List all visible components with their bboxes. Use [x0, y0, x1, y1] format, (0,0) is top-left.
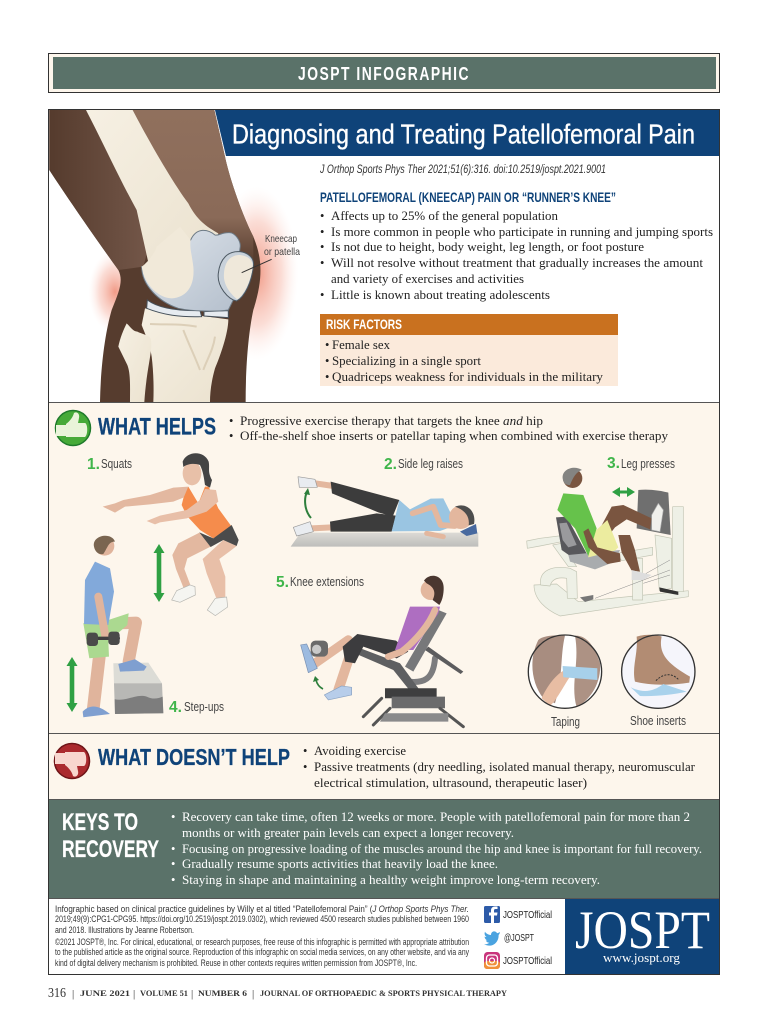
- exercise label 5: knee extensions: [276, 574, 364, 591]
- bullet list: about the condition: •: [320, 240, 324, 254]
- panel: keys to recovery: [49, 800, 719, 898]
- bullet list: about the condition: •: [320, 288, 324, 302]
- panel: risk factors: Female sex: [332, 338, 391, 352]
- heading: patellofemoral pain: PATELLOFEMORAL (KNEECAP) PAIN OR “RUNNER’S KNEE”: [320, 189, 616, 205]
- footer text: source and copyright: Infographic based on clinical practice guidelines by Willy et al titled “Patellofemoral Pain” (J Orthop Sports Phys Ther.: [55, 904, 469, 914]
- footer text: source and copyright: and 2018. Illustrations by Jeanne Robertson.: [55, 925, 194, 935]
- icon: taping circle: [528, 635, 602, 708]
- icon: twitter: [484, 931, 500, 946]
- leg silhouette: [49, 110, 260, 402]
- footer text: source and copyright: kind of digital delivery mechanism is prohibited. Reuse in other contexts requires written permission from JOSPT®, Inc.: [55, 958, 417, 968]
- bullet list: about the condition: Little is known about treating adolescents: [331, 288, 550, 302]
- label: twitter handle: @JOSPT: [504, 932, 534, 944]
- heading: keys to recovery: KEYS TO: [62, 809, 138, 836]
- bullet list: about the condition: Affects up to 25% of the general population: [331, 209, 559, 223]
- page footer: JOURNAL OF ORTHOPAEDIC & SPORTS PHYSICAL THERAPY: [260, 989, 507, 998]
- bullet list: keys to recovery: months or with greater pain levels can expect a longer recovery.: [182, 826, 514, 840]
- footer text: source and copyright: to the published article as the original source. Reproduction of this infographic on social media services, on any other website, and via any: [55, 947, 469, 957]
- page footer: |: [133, 988, 135, 1000]
- illustration: side leg raise: [291, 477, 478, 547]
- illustration: squat: [103, 453, 239, 616]
- arrow: side leg raise: [304, 488, 311, 518]
- panel: risk factors: •: [325, 354, 329, 368]
- bullet list: keys to recovery: •: [171, 873, 175, 887]
- exercise label 4: step-ups: 4.: [169, 699, 182, 716]
- exercise label 4: step-ups: [169, 699, 224, 716]
- bullet list: keys to recovery: •: [171, 810, 175, 824]
- label: kneecap or patella: Kneecap: [265, 233, 297, 245]
- label: taping: Taping: [551, 715, 580, 729]
- exercise label 1: squats: 1.: [87, 456, 100, 473]
- exercise label 1: squats: [87, 456, 132, 473]
- bullet list: what helps: [229, 414, 669, 443]
- page footer: [48, 986, 507, 1001]
- citation: J Orthop Sports Phys Ther 2021;51(6):316. doi:10.2519/jospt.2021.9001: [319, 162, 606, 176]
- header banner: JOSPT Infographic: [48, 54, 720, 92]
- exercise label 2: side leg raises: Side leg raises: [398, 457, 463, 471]
- page footer: JUNE 2021: [80, 989, 130, 998]
- panel background: what doesn't help: [49, 734, 719, 799]
- illustration: leg press: [527, 468, 688, 616]
- arrow: squat movement: [154, 544, 164, 602]
- exercise label 2: side leg raises: [384, 456, 463, 473]
- page footer: |: [191, 988, 193, 1000]
- bullet list: keys to recovery: •: [171, 857, 175, 871]
- icon: thumbs down: [54, 744, 90, 778]
- panel background: what helps: [49, 403, 719, 733]
- arrow: step-up movement: [66, 657, 78, 712]
- bullet list: keys to recovery: Focusing on progressive loading of the muscles around the hip and knee is important for full recovery.: [182, 842, 702, 856]
- bullet list: what doesn't help: •: [303, 744, 307, 758]
- label: facebook handle: JOSPTOfficial: [503, 909, 552, 921]
- heading: keys to recovery: RECOVERY: [62, 836, 159, 863]
- heading: what helps: WHAT HELPS: [98, 414, 216, 440]
- icon: instagram: [484, 952, 500, 969]
- heading: keys to recovery: [62, 809, 159, 863]
- exercise label 2: side leg raises: 2.: [384, 456, 397, 473]
- panel: risk factors: Specializing in a single sport: [332, 354, 482, 368]
- page footer: |: [72, 988, 74, 1000]
- page footer: 316: [48, 986, 66, 1001]
- bullet list: what doesn't help: •: [303, 760, 307, 774]
- title banner: [215, 110, 719, 156]
- heading: what doesn't help: WHAT DOESN’T HELP: [98, 744, 290, 770]
- footer text: source and copyright: 2019;49(9):CPG1-CPG95. https://doi.org/10.2519/jospt.2019.0302), which reviewed 4500 research studies published between 1960: [55, 914, 469, 924]
- bullet list: what doesn't help: electrical stimulation, ultrasound, therapeutic laser): [314, 776, 587, 790]
- bullet list: about the condition: [320, 209, 713, 302]
- header banner: JOSPT Infographic: JOSPT INFOGRAPHIC: [298, 63, 470, 84]
- label: kneecap or patella: or patella: [264, 246, 300, 258]
- exercise label 3: leg presses: [607, 455, 675, 472]
- bullet list: about the condition: Will not resolve without treatment that gradually increases the amount: [331, 256, 704, 270]
- bullet list: what helps: Progressive exercise therapy that targets the knee and hip: [240, 414, 543, 428]
- page footer: |: [252, 988, 254, 1000]
- bullet list: about the condition: •: [320, 256, 324, 270]
- label: instagram handle: JOSPTOfficial: [503, 955, 552, 967]
- footer text: source and copyright: ©2021 JOSPT®, Inc. For clinical, educational, or research purposes, free reuse of this infographic is permitted with appropriate attribution: [55, 937, 469, 947]
- illustration: knee extension: [301, 576, 463, 727]
- label: kneecap or patella: [264, 233, 300, 258]
- main frame: [48, 110, 720, 974]
- bullet list: what doesn't help: Passive treatments (dry needling, isolated manual therapy, neuromuscular: [314, 760, 696, 774]
- bullet list: about the condition: Is more common in people who participate in running and jumping sports: [331, 225, 713, 239]
- logo: JOSPT: JOSPT: [575, 900, 710, 960]
- exercise label 1: squats: Squats: [101, 457, 132, 471]
- page footer: NUMBER 6: [198, 989, 247, 998]
- exercise label 5: knee extensions: 5.: [276, 574, 289, 591]
- bullet list: keys to recovery: Staying in shape and maintaining a healthy weight improve long-term recovery.: [182, 873, 600, 887]
- arrow: leg press movement: [612, 487, 635, 497]
- bullet list: keys to recovery: [171, 810, 702, 887]
- arrow: knee extension: [313, 676, 323, 689]
- label: shoe inserts: Shoe inserts: [630, 714, 686, 728]
- bullet list: keys to recovery: Gradually resume sports activities that heavily load the knee.: [182, 857, 498, 871]
- illustration: step-up: [83, 536, 163, 717]
- exercise label 4: step-ups: Step-ups: [184, 700, 224, 714]
- bullet list: keys to recovery: •: [171, 842, 175, 856]
- bullet list: what helps: •: [229, 429, 233, 443]
- panel: risk factors: RISK FACTORS: [326, 316, 402, 332]
- exercise label 3: leg presses: 3.: [607, 455, 620, 472]
- bullet list: about the condition: and variety of exercises and activities: [331, 272, 524, 286]
- panel: knee anatomy illustration: [49, 110, 298, 402]
- panel: risk factors: Quadriceps weakness for individuals in the military: [332, 370, 604, 384]
- glow: inflammation: [88, 187, 298, 360]
- exercise label 3: leg presses: Leg presses: [621, 457, 675, 471]
- bullet list: about the condition: •: [320, 209, 324, 223]
- bullet list: about the condition: •: [320, 225, 324, 239]
- exercise label 5: knee extensions: Knee extensions: [290, 575, 364, 589]
- logo: JOSPT: www.jospt.org: [603, 950, 680, 965]
- page footer: VOLUME 51: [140, 989, 188, 998]
- bullet list: what doesn't help: [303, 744, 696, 790]
- panel: risk factors: [320, 314, 618, 386]
- icon: shoe inserts circle: [622, 635, 695, 708]
- bullet list: keys to recovery: Recovery can take time, often 12 weeks or more. People with patellofemoral pain for more than 2: [182, 810, 690, 824]
- bullet list: what helps: Off-the-shelf shoe inserts or patellar taping when combined with exercise therapy: [240, 429, 669, 443]
- bullet list: what doesn't help: Avoiding exercise: [314, 744, 406, 758]
- icon: facebook: [484, 906, 500, 923]
- bullet list: about the condition: Is not due to height, body weight, leg length, or foot posture: [331, 240, 644, 254]
- icon: thumbs up: [56, 410, 90, 446]
- panel: risk factors: •: [325, 370, 329, 384]
- footer text: source and copyright: [55, 904, 469, 968]
- bullet list: what helps: •: [229, 414, 233, 428]
- knee joint: [118, 227, 272, 402]
- panel: risk factors: •: [325, 338, 329, 352]
